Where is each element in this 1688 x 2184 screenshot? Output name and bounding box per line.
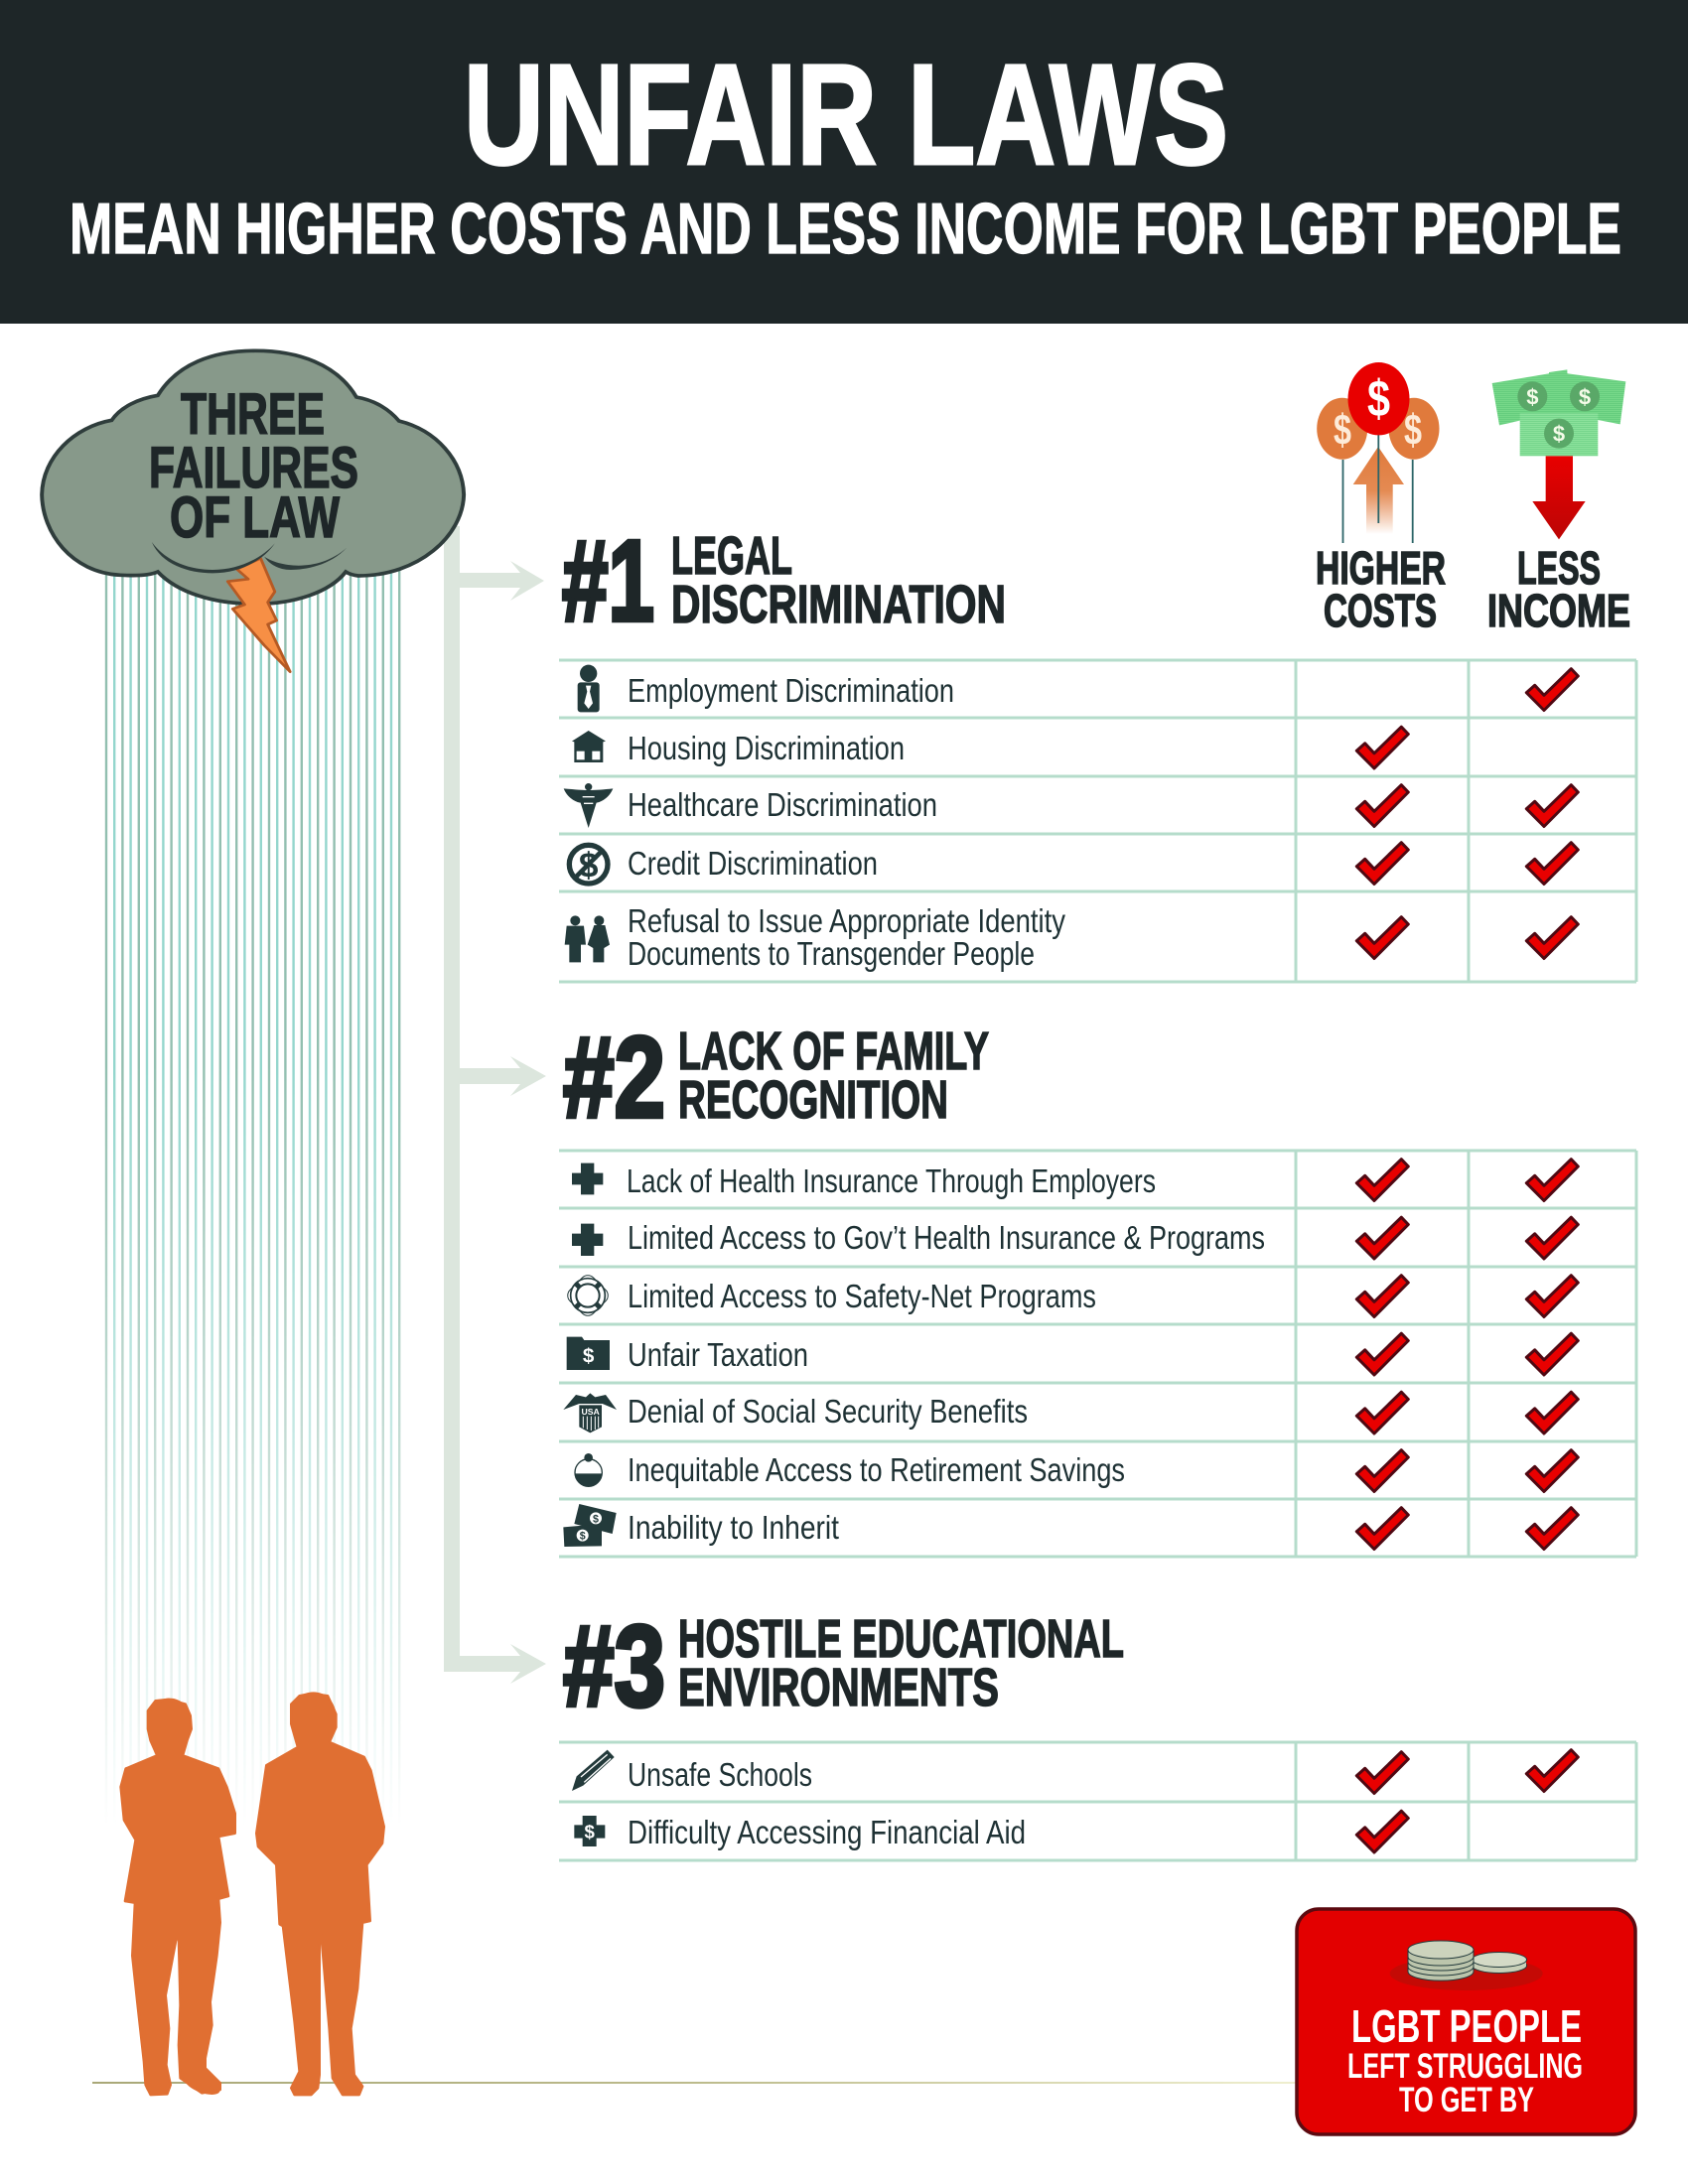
arrow to #1: [460, 561, 544, 601]
connector with three arrows: [444, 526, 546, 1684]
icon: higher costs balloons: $: [1367, 370, 1390, 428]
icon: cross: [572, 1163, 603, 1194]
row: retirement savings: Inequitable Access to Retirement Savings: [628, 1451, 1125, 1488]
table 3: [559, 1742, 1636, 1860]
icon: less income money and arrow: $: [1579, 385, 1591, 410]
row: healthcare discrimination: [564, 783, 1578, 828]
cloud text: THREE: [181, 382, 325, 447]
icon: bobber: [575, 1453, 602, 1487]
cloud inner curves: [152, 542, 347, 573]
heading #2: LACK OF FAMILY: [678, 1022, 989, 1081]
icon: employee: [578, 665, 600, 712]
icon: cross: [572, 1224, 603, 1256]
callout: LGBT people left struggling: TO GET BY: [1399, 2081, 1534, 2119]
row: identity documents: Documents to Transgender People: [628, 935, 1035, 972]
heading #2: #2: [563, 1013, 665, 1142]
arrow to #2: [460, 1056, 546, 1096]
row: health insurance employers: [572, 1160, 1578, 1201]
icon: man and woman: [565, 915, 610, 962]
icon: pencil: [572, 1750, 615, 1791]
icon: less income money and arrow: $: [1553, 421, 1565, 446]
row: employment discrimination: Employment Discrimination: [628, 672, 954, 709]
heading #1: #1: [562, 516, 654, 645]
row: inability to inherit: [563, 1504, 1578, 1549]
callout text: LGBT PEOPLE: [1351, 2000, 1582, 2052]
row: government health insurance: [572, 1217, 1578, 1259]
people silhouettes: [121, 1694, 384, 2097]
title: UNFAIR LAWS: [464, 35, 1228, 195]
icon: no credit: $: [579, 846, 599, 885]
lightning bolt: [227, 558, 290, 672]
icon: eagle shield: [563, 1393, 617, 1433]
row: unsafe schools: Unsafe Schools: [628, 1756, 812, 1793]
column heading: less income: LESS: [1517, 542, 1601, 594]
row: identity documents: [565, 902, 1578, 972]
row: government health insurance: Limited Access to Gov’t Health Insurance & Programs: [628, 1219, 1265, 1256]
row: unfair taxation: Unfair Taxation: [628, 1336, 808, 1373]
icon: higher costs balloons: $: [1404, 406, 1422, 455]
cloud with title and lightning: [42, 350, 464, 672]
icon: no credit: [569, 845, 608, 885]
column heading: higher costs: HIGHER: [1316, 542, 1446, 594]
row: unfair taxation: [567, 1333, 1578, 1375]
icon: cash bills: [563, 1504, 617, 1547]
heading #3: #3: [563, 1601, 665, 1730]
icon: cross with dollar: [574, 1816, 605, 1846]
heading #2: [563, 1013, 989, 1142]
icon: less income money and arrow: [1492, 369, 1625, 539]
row: financial aid: [574, 1811, 1408, 1852]
icon: cross with dollar: $: [584, 1821, 595, 1842]
row: identity documents: Refusal to Issue Appropriate Identity: [628, 902, 1065, 939]
row: unsafe schools: [572, 1750, 1578, 1793]
icon: house: [572, 731, 606, 762]
row: credit discrimination: Credit Discrimination: [628, 845, 878, 882]
column heading: less income: INCOME: [1487, 585, 1630, 636]
callout: LGBT people left struggling: LEFT STRUGGLING: [1347, 2047, 1583, 2086]
cloud shape: [42, 350, 464, 604]
row: social security: Denial of Social Security Benefits: [628, 1393, 1028, 1430]
table 1: [559, 660, 1636, 982]
heading #3: [563, 1601, 1124, 1730]
header banner: [0, 0, 1688, 324]
arrow to #3: [444, 1644, 546, 1684]
row: safety-net programs: Limited Access to Safety-Net Programs: [628, 1278, 1096, 1314]
cloud with title and lightning: OF LAW: [170, 485, 340, 550]
icon: caduceus: [564, 783, 613, 828]
row: social security: [563, 1392, 1578, 1433]
icon: cash bills: $: [593, 1513, 599, 1525]
table 2: [559, 1151, 1636, 1557]
row: credit discrimination: [569, 843, 1578, 885]
heading #2: RECOGNITION: [678, 1070, 948, 1130]
column heading: higher costs: COSTS: [1324, 585, 1437, 636]
icon: tax folder: $: [583, 1344, 595, 1367]
column heading: higher costs: [1316, 542, 1446, 636]
row: housing discrimination: [572, 727, 1408, 768]
person right: [256, 1694, 384, 2095]
row: financial aid: Difficulty Accessing Financial Aid: [628, 1814, 1026, 1850]
row: housing discrimination: Housing Discrimination: [628, 730, 905, 766]
icon: cash bills: $: [580, 1531, 586, 1543]
ground line: [92, 2082, 1299, 2084]
rain lines: [106, 566, 399, 1827]
callout: LGBT people left struggling: [1297, 1909, 1635, 2134]
heading #1: DISCRIMINATION: [671, 575, 1006, 634]
person left: [121, 1700, 235, 2097]
icon: less income money and arrow: $: [1526, 385, 1538, 410]
heading #1: [562, 516, 1006, 645]
heading #1: LEGAL: [671, 526, 792, 586]
row: inability to inherit: Inability to Inherit: [628, 1509, 839, 1546]
cloud with title and lightning: FAILURES: [149, 436, 358, 500]
row: safety-net programs: [564, 1272, 1578, 1319]
icon: higher costs balloons: [1317, 362, 1440, 543]
column heading: less income: [1487, 542, 1630, 636]
row: health insurance employers: Lack of Health Insurance Through Employers: [627, 1162, 1156, 1199]
icon: eagle shield: USA: [582, 1407, 601, 1417]
icon: tax folder: [567, 1337, 610, 1370]
icon: coins: [1390, 1941, 1543, 1990]
row: healthcare discrimination: Healthcare Discrimination: [628, 786, 937, 823]
row: employment discrimination: [578, 665, 1578, 712]
icon: higher costs balloons: $: [1334, 406, 1351, 455]
icon: life ring: [564, 1272, 612, 1319]
heading #3: ENVIRONMENTS: [678, 1658, 999, 1717]
heading #3: HOSTILE EDUCATIONAL: [678, 1609, 1124, 1669]
row: retirement savings: [575, 1450, 1578, 1491]
